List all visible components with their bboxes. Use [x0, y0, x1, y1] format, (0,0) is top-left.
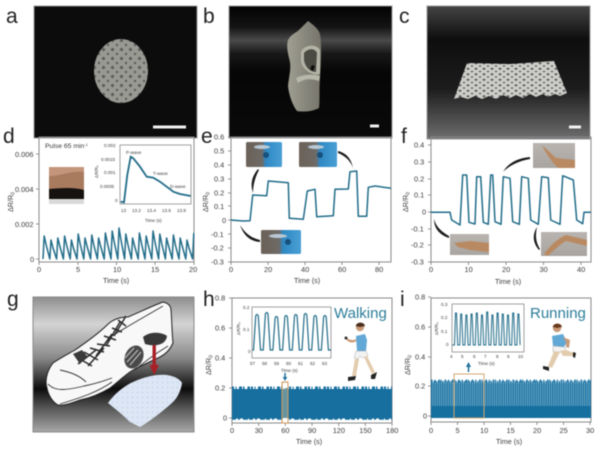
arrow h	[284, 373, 286, 378]
x axis tick labels i: 0	[429, 426, 433, 435]
red arrow	[150, 345, 159, 375]
inset text labels d: T-wave	[153, 171, 168, 176]
y axis tick labels e: -0.2	[211, 244, 224, 252]
panel i: running chart	[400, 288, 594, 446]
inset text labels i: 10	[518, 354, 524, 359]
panel f: finger bending chart	[401, 125, 591, 286]
y axis tick labels f: -0.2	[411, 240, 424, 250]
x axis tick labels d: 0	[37, 265, 41, 274]
inset chart d: waveform	[94, 143, 191, 223]
label d: d	[3, 125, 15, 148]
inset text labels h: 58	[262, 361, 268, 366]
y axis tick labels e: 0.2	[214, 188, 224, 198]
y axis tick labels d: 0.002	[15, 220, 34, 229]
inset text labels d: 0	[115, 198, 118, 203]
x axis tick labels i: 10	[480, 426, 488, 435]
x axis tick labels d: 10	[113, 265, 121, 274]
y axis tick labels e: -0.3	[211, 258, 224, 266]
inset text labels d: 13.4	[147, 208, 156, 213]
printed object	[287, 21, 321, 112]
y axis tick labels f: 0.3	[414, 158, 424, 166]
label a: a	[6, 5, 18, 28]
inset text labels d: ΔR/R₀	[94, 165, 99, 178]
inset text labels d: 0.002	[104, 143, 116, 148]
inset text labels d: P-wave	[126, 150, 142, 155]
inset text labels h: 63	[322, 361, 328, 366]
inset text labels d: D-wave	[170, 184, 186, 189]
pulse signal line	[43, 228, 194, 259]
y axis tick labels f	[411, 140, 426, 266]
inset text labels i: 0.2	[441, 315, 448, 320]
walking label: Walking	[334, 305, 387, 322]
inset text labels d: 13.2	[132, 208, 141, 213]
y axis title e: ΔR/R	[201, 195, 210, 212]
inset text labels h: 60	[286, 361, 292, 366]
y axis tick labels i	[415, 292, 427, 420]
panel b: 3D printed object photo	[203, 5, 392, 138]
x axis tick labels h: 30	[255, 426, 263, 435]
x axis tick labels e: 40	[301, 265, 309, 274]
y axis title f: ΔR/R	[401, 195, 410, 212]
x axis tick labels i	[429, 426, 594, 435]
label f: f	[401, 125, 407, 148]
signal band i	[431, 381, 591, 418]
x axis tick labels h: 120	[333, 426, 345, 435]
y axis tick labels d: 0.006	[15, 150, 34, 159]
inset text labels d: 13.6	[162, 208, 171, 213]
inset waveform line	[121, 157, 191, 202]
y axis tick labels h: 0.2	[215, 384, 225, 392]
x axis tick labels i: 15	[506, 426, 515, 435]
x axis title f: Time (s)	[495, 277, 521, 286]
y axis tick labels h: 0.6	[215, 324, 225, 332]
x axis tick labels f	[429, 265, 585, 274]
inset text labels i: 6	[473, 354, 476, 359]
arrow f bottom left	[434, 219, 449, 238]
y axis tick labels f: 0.1	[414, 190, 424, 200]
y axis title f: 0	[406, 192, 412, 195]
y axis tick labels h	[215, 294, 227, 422]
y axis tick labels e: 0.4	[214, 160, 224, 170]
running label: Running	[530, 305, 586, 322]
inset text labels d: 13.8	[177, 208, 186, 213]
label g: g	[7, 288, 19, 311]
y axis title i: 0	[408, 355, 414, 358]
y axis tick labels f: 0.2	[414, 174, 424, 184]
pulse heading: -1	[84, 142, 89, 147]
x axis tick labels f: 30	[540, 265, 548, 274]
inset text labels i: 7	[484, 354, 487, 359]
x axis tick labels d: 20	[189, 265, 197, 274]
circular lattice sample	[94, 39, 148, 103]
panel e: bending chart	[201, 125, 391, 285]
x axis tick labels e: 60	[338, 265, 346, 274]
inset text labels i	[434, 302, 524, 366]
y axis tick labels e: -0.1	[211, 230, 224, 239]
y axis title d: 0	[10, 192, 16, 195]
inset text labels h: ΔR/R₀	[236, 322, 241, 335]
arrow e top left	[252, 169, 259, 193]
inset text labels h: 57	[250, 361, 256, 366]
inset text labels d: 0.0005	[100, 184, 114, 189]
inset text labels i: 0.1	[441, 329, 448, 334]
y axis title h: ΔR/R	[204, 358, 213, 375]
shoe drawing	[46, 302, 173, 405]
y axis tick labels h: 0.8	[215, 294, 225, 302]
inset text labels i: 0	[446, 342, 449, 347]
y axis title e: 0	[206, 192, 212, 195]
y axis title d: ΔR/R	[6, 195, 15, 212]
label e: e	[201, 125, 213, 148]
x axis tick labels f: 10	[464, 265, 473, 274]
photo e top left	[246, 142, 282, 167]
photo: wrist	[49, 167, 84, 204]
arrow i	[468, 366, 470, 372]
y axis tick labels f: 0.4	[414, 140, 424, 150]
y axis tick labels d: 0.004	[15, 185, 34, 194]
y axis tick labels d: 0	[30, 255, 34, 264]
icon: walking person	[344, 323, 377, 381]
inset text labels h: 0	[248, 349, 251, 354]
icon: running person	[543, 324, 576, 371]
inset text labels i: ΔR/R₀	[434, 322, 439, 335]
inset text labels h: 0.2	[243, 305, 250, 310]
scale bar a	[153, 126, 186, 128]
scale bar c	[569, 126, 581, 128]
photo e bottom	[261, 230, 301, 254]
panel c: flat lattice sheet photo	[399, 5, 590, 139]
arrow e bottom	[240, 225, 260, 242]
insole	[108, 375, 182, 427]
pulse heading: Pulse 65 min	[45, 143, 84, 150]
inset text labels d: 0.0015	[101, 157, 115, 162]
signal line e	[231, 171, 391, 221]
inset waveform h	[252, 312, 331, 350]
y axis tick labels e: 0.6	[214, 132, 224, 142]
signal band h	[232, 388, 392, 419]
x axis tick labels e: 80	[375, 265, 383, 274]
x axis tick labels h: 180	[386, 426, 398, 435]
arrow e top right	[338, 151, 353, 168]
x axis tick labels f: 20	[502, 265, 510, 274]
inset chart i	[434, 302, 524, 366]
y axis tick labels i: 0.6	[415, 322, 425, 332]
y axis title h: 0	[208, 355, 214, 358]
inset text labels h: 61	[298, 361, 304, 366]
x axis tick labels e: 0	[229, 265, 233, 274]
photo f top: bent arm	[533, 143, 575, 168]
x axis tick labels d: 5	[76, 265, 80, 274]
y axis tick labels e: 0.3	[214, 174, 224, 184]
x axis tick labels h: 150	[359, 426, 372, 435]
x axis title d: Time (s)	[103, 276, 129, 285]
panel a: circular lattice photo	[6, 5, 197, 138]
y axis tick labels e	[211, 132, 226, 266]
y axis tick labels i: 0.8	[415, 292, 425, 302]
inset text labels i: Time (s)	[478, 361, 495, 366]
inset text labels i: 0.3	[441, 302, 448, 307]
inset text labels h	[236, 305, 328, 373]
x axis title h: Time (s)	[296, 437, 322, 446]
y axis tick labels i: 0	[423, 412, 427, 420]
x axis tick labels i: 20	[533, 426, 541, 435]
inset text labels h: 62	[310, 361, 316, 366]
y axis tick labels h: 0	[223, 414, 227, 422]
x axis tick labels i: 30	[586, 426, 594, 435]
panel d: pulse chart	[3, 125, 197, 285]
label i: i	[400, 288, 405, 311]
inset text labels i: 8	[496, 354, 499, 359]
highlight box i	[454, 374, 484, 418]
inset text labels i: 4	[450, 354, 453, 359]
x axis tick labels h: 90	[308, 426, 316, 435]
x axis tick labels d: 15	[151, 265, 159, 274]
x axis tick labels i: 5	[456, 426, 460, 435]
signal line f	[431, 175, 591, 225]
y axis tick labels f: -0.1	[411, 224, 424, 234]
y axis tick labels h: 0.4	[215, 354, 225, 362]
highlight box h	[282, 382, 288, 423]
lattice sheet	[454, 61, 567, 99]
inset text labels h: 59	[274, 361, 280, 366]
y axis tick labels f: 0	[422, 208, 426, 216]
inset text labels h: 0.1	[243, 327, 250, 332]
x axis tick labels f: 40	[577, 265, 585, 274]
x axis title i: Time (s)	[496, 437, 522, 446]
inset text labels d: 13	[121, 208, 127, 213]
y axis tick labels i: 0.2	[415, 382, 425, 390]
y axis tick labels f: -0.3	[411, 258, 424, 266]
label b: b	[203, 5, 215, 28]
x axis tick labels h	[230, 426, 398, 435]
y axis tick labels e: 0.5	[214, 146, 224, 156]
arrow f bottom right	[534, 227, 540, 250]
inset waveform i	[452, 312, 520, 345]
inset text labels i: 9	[507, 354, 510, 359]
inset text labels i: 5	[461, 354, 464, 359]
y axis tick labels e: 0	[222, 216, 226, 225]
y axis title i: ΔR/R	[403, 358, 412, 375]
panel h: walking chart	[203, 288, 398, 446]
photo e top right	[299, 142, 337, 167]
x axis tick labels f: 0	[429, 265, 433, 274]
y axis tick labels e: 0.1	[214, 202, 224, 211]
panel g: shoe with insole	[7, 288, 194, 432]
photo f bottom right: bent arm	[541, 232, 587, 256]
y axis tick labels d	[15, 150, 34, 264]
scale bar b	[370, 124, 379, 128]
inset text labels d: Time (s)	[145, 218, 162, 223]
y axis tick labels i: 0.4	[415, 352, 425, 362]
x axis tick labels h: 60	[281, 426, 290, 435]
label c: c	[399, 5, 410, 28]
x axis tick labels e: 20	[264, 265, 272, 274]
x axis title e: Time (s)	[294, 276, 320, 285]
x axis tick labels i: 25	[560, 426, 568, 435]
label h: h	[203, 288, 215, 311]
arrow f top	[503, 157, 530, 172]
x axis tick labels d	[37, 265, 197, 274]
inset chart h	[236, 305, 331, 373]
inset text labels d	[94, 143, 186, 223]
inset text labels d: 0.001	[104, 170, 116, 175]
inset text labels h: Time (s)	[281, 368, 298, 373]
photo f bottom left: flat arm	[450, 234, 489, 255]
x axis tick labels e	[229, 265, 383, 274]
x axis tick labels h: 0	[230, 426, 234, 435]
